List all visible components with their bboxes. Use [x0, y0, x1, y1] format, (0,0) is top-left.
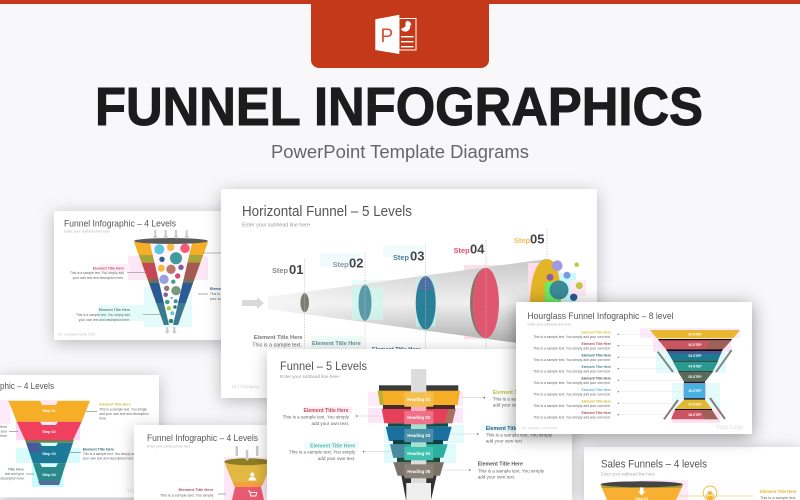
funnel: [600, 481, 683, 500]
main title: FUNNEL INFOGRAPHICS: [95, 77, 703, 137]
panel: funnel infographic 4 levels (left): [0, 375, 159, 498]
step 04: [454, 244, 484, 254]
step labels: Step 01: [42, 409, 56, 413]
label: top right: Element Title Here: [99, 402, 131, 406]
step 01: Step: [272, 266, 289, 275]
element label 1: This is a sample text.: [252, 342, 302, 348]
heading: Horizontal Funnel – 5 Levels: [242, 203, 412, 220]
level labels: 06-STEP: [689, 389, 702, 393]
label: right gray: This is a sample text. You simply: [478, 468, 545, 474]
heading: Hourglass Funnel Infographic – 8 level: [528, 311, 674, 322]
step labels: Step 03: [42, 452, 56, 456]
funnel bubbles: [154, 244, 190, 323]
step 05: Step: [514, 236, 531, 245]
element label 2: Element Title Here: [312, 341, 361, 347]
label: left: Here: [0, 425, 7, 429]
icon: person: [248, 472, 256, 480]
row labels: Element Title Here: [581, 342, 611, 346]
step 03: [393, 252, 424, 262]
row labels: This is a sample text. You simply add your own text: [533, 346, 610, 350]
input arrows: [153, 230, 189, 334]
panel: funnel 5 levels: [267, 349, 572, 500]
step 04: Step: [454, 246, 470, 255]
panel: horizontal funnel 5 levels: Enter your subhead line here: [242, 222, 310, 228]
hourglass levels: [650, 330, 740, 419]
top red bar: [0, 0, 800, 4]
funnel mouth with bubbles: [528, 259, 586, 305]
label: top right: [86, 402, 149, 420]
label: mid right: This is a sample text. You simply add: [83, 452, 137, 456]
footer: 01 | Company: [232, 384, 260, 389]
label: left teal: your own text and description here.: [79, 318, 130, 322]
heading: phic – 4 Levels: [0, 381, 54, 392]
label: left teal: Element Title Here: [99, 308, 130, 312]
step labels: Step 02: [42, 430, 56, 434]
label: [760, 489, 797, 500]
label: right gray: [442, 462, 545, 480]
label: left teal: Element Title Here: [310, 444, 355, 450]
label: left: [0, 425, 34, 480]
colored backdrops: [98, 256, 208, 327]
label: top right: This is a sample text. You simply: [99, 408, 147, 412]
row labels: This is a sample text. You simply add your own text: [533, 392, 610, 396]
panel: hourglass funnel 8 level: [516, 302, 752, 434]
row labels: This is a sample text. You simply add your own text: [533, 404, 610, 408]
step 03: 03: [410, 248, 424, 264]
panel: sales funnels 4 levels: [584, 447, 800, 500]
arrow: [242, 297, 264, 309]
footer: 01 | Company Name 2019: [58, 332, 95, 336]
label: Element Title Here: [178, 487, 214, 492]
label: left red: This is a sample text. You simply add: [70, 271, 124, 275]
label: left teal: add your own text.: [318, 456, 355, 461]
icon: cart: [248, 491, 257, 496]
label: left red: [70, 266, 146, 280]
label: right yellow: add your own text.: [493, 402, 530, 408]
panel: funnel infographic 4 levels (top left): [54, 211, 244, 340]
level labels: 02-STEP: [689, 343, 702, 347]
funnel: [224, 458, 271, 500]
label: left red: your own text and description here.: [73, 276, 124, 280]
label: right blue: Element Title Here: [486, 426, 531, 432]
label: left: description here: [1, 476, 24, 480]
step labels: Step 04: [42, 473, 57, 477]
label: top right: here.: [99, 416, 107, 420]
row labels: This is a sample text. You simply add your own text: [533, 358, 610, 362]
row labels: This is a sample text. You simply add your own text: [533, 335, 610, 339]
label: mid right: Element Title Here: [83, 448, 114, 452]
level labels: 08-STEP: [689, 413, 702, 417]
band 4: [390, 440, 448, 458]
label: right blue: This is a sample text. You simply: [486, 432, 553, 438]
connector with icon: [675, 486, 753, 500]
backdrops: [368, 392, 464, 463]
colored backdrops: [0, 400, 80, 487]
element label 1: [252, 335, 302, 348]
central column and heading blocks: Heading 04: [407, 451, 431, 456]
colored backdrops: [311, 245, 512, 350]
label: Element Title Here: [760, 489, 797, 494]
element label 1: Element Title Here: [254, 335, 302, 341]
label: right: This is a sample: [210, 292, 234, 296]
footer logo: Your Logo: [127, 488, 150, 494]
step 01: 01: [289, 262, 303, 277]
row labels: Element Title Here: [581, 354, 611, 358]
label: right gray: Element Title Here: [478, 462, 523, 468]
panel: funnel infographic 4 levels (bottom): [134, 425, 274, 500]
step 01: [272, 265, 304, 274]
label: right blue: [450, 424, 553, 444]
panel: funnel infographic 4 levels (bottom): Enter your subhead line here: [147, 444, 191, 448]
label: left teal: [76, 308, 160, 322]
side bars: [658, 350, 732, 419]
label: top right: add your own text and description: [99, 412, 149, 416]
icon: PowerPoint logo: [375, 15, 416, 54]
row labels: Element Title Here: [581, 411, 611, 415]
level labels: [689, 332, 702, 417]
heading: Funnel – 5 Levels: [280, 359, 367, 373]
panel: funnel infographic 4 levels (top left): Enter your subhead line here: [64, 230, 110, 234]
central column and heading blocks: [404, 369, 433, 500]
label: [160, 487, 226, 498]
heading: Funnel Infographic – 4 Levels: [147, 433, 258, 444]
connector dots: [618, 334, 684, 415]
band 2: [382, 405, 456, 423]
level labels: 05-STEP: [689, 375, 702, 379]
label: right yellow: [462, 390, 538, 408]
band 1: [378, 385, 460, 405]
row labels: This is a sample text. You simply add your own text: [533, 416, 610, 420]
level labels: 01-STEP: [689, 332, 702, 336]
label: left red: Element Title Here: [93, 266, 124, 270]
backdrops: [640, 328, 740, 423]
step 03: Step: [393, 253, 410, 262]
panel: hourglass funnel 8 level: Enter your subhead line here: [528, 322, 571, 326]
backdrop: [224, 457, 267, 500]
central column and heading blocks: Heading 02: [407, 415, 431, 420]
dashed step lines: [305, 229, 547, 350]
icon: PowerPoint logo: P: [380, 26, 393, 47]
band 3: [386, 423, 452, 441]
label: left red: add your own text.: [311, 421, 349, 426]
step 05: 05: [530, 232, 544, 246]
funnel bands: [8, 401, 90, 485]
panel: funnel 5 levels: Enter your subhead line here: [280, 374, 339, 379]
panel: horizontal funnel 5 levels: [221, 189, 597, 398]
label: right: Element Title: [210, 287, 232, 291]
level labels: 07-STEP: [689, 402, 702, 406]
label: left: here: [0, 434, 7, 438]
label: left: your: [1, 430, 8, 434]
PowerPoint badge: [311, 0, 489, 68]
label: left red: Element Title Here: [304, 408, 349, 414]
row labels: [533, 330, 611, 420]
step 02: [332, 258, 363, 268]
row labels: Element Title Here: [581, 400, 611, 404]
label: right: [198, 252, 221, 301]
row labels: Element Title Here: [581, 365, 611, 369]
label: left red: This is a sample text. You simply: [283, 414, 350, 420]
row labels: This is a sample text. You simply add your own text: [533, 370, 610, 374]
step 02: 02: [349, 256, 363, 270]
footer: 01 | Company | Year 2019: [522, 426, 557, 430]
label: right yellow: Element Title Here: [493, 390, 538, 396]
central column and heading blocks: Heading 05: [407, 469, 431, 474]
central column and heading blocks: Heading 01: [407, 397, 431, 402]
row labels: Element Title Here: [581, 330, 611, 334]
level labels: 03-STEP: [689, 354, 702, 358]
step 02: Step: [333, 260, 349, 269]
label: mid right: your own text and description here.: [83, 456, 134, 460]
label: left teal: [289, 442, 390, 461]
panel: sales funnels 4 levels: Enter your subhead line here: [601, 472, 655, 476]
element label 3: Element Title Here: [372, 347, 421, 353]
label: right: your own text: [210, 297, 230, 301]
step 05: [514, 234, 544, 244]
label: left: text and your: [5, 472, 25, 476]
backdrop: [640, 480, 688, 500]
central column and heading blocks: Heading 03: [407, 433, 431, 438]
arrows: [236, 446, 258, 461]
label: right blue: add your own text: [486, 438, 523, 444]
heading: Sales Funnels – 4 levels: [601, 458, 707, 470]
footer: Your Logo: [716, 425, 744, 431]
level labels: 04-STEP: [689, 364, 702, 368]
label: right gray: add your own text.: [478, 474, 515, 480]
band 5: [393, 458, 444, 476]
label: This is a sample text.: [760, 495, 797, 500]
label: right yellow: This is a sample text.: [493, 396, 536, 402]
row labels: This is a sample text. You simply add your own text: [533, 381, 610, 385]
label: left: Title Here: [8, 468, 24, 472]
funnel body: [134, 238, 208, 325]
label: left red: [283, 406, 380, 426]
label: This is a sample text. You simply: [160, 494, 213, 498]
row labels: Element Title Here: [581, 388, 611, 392]
funnel tail: [401, 474, 437, 500]
funnel discs: [300, 268, 499, 338]
step labels: [42, 409, 57, 477]
heading: Funnel Infographic – 4 Levels: [64, 218, 176, 230]
label: left teal: This is a sample text. You simply: [289, 450, 356, 454]
row labels: Element Title Here: [581, 376, 611, 380]
funnel cone: [292, 259, 546, 343]
label: left teal: This is a sample text. You simply add: [76, 313, 130, 317]
step 04: 04: [470, 242, 485, 256]
footer: [522, 425, 744, 431]
subtitle: PowerPoint Template Diagrams: [271, 142, 529, 162]
label: mid right: [65, 448, 137, 460]
